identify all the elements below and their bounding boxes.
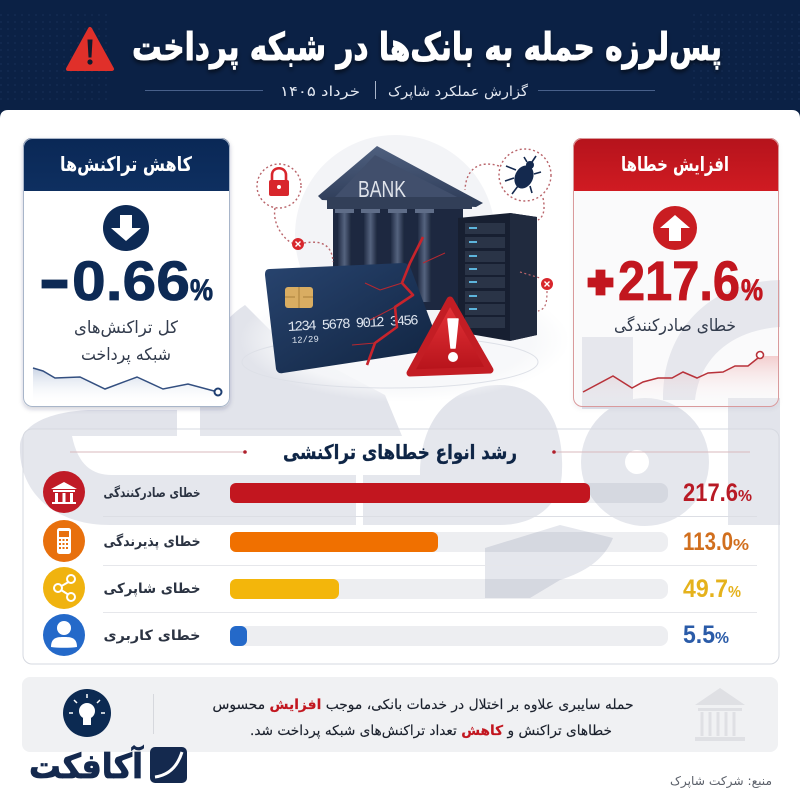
icon: up arrow — [653, 206, 697, 250]
subtitle: گزارش عملکرد شاپرک — [388, 83, 528, 100]
row: shaparak errors: % — [728, 584, 741, 601]
caption: شبکه پرداخت — [81, 345, 171, 365]
icon: down arrow — [103, 205, 149, 251]
row: shaparak errors: 49.7 — [683, 575, 728, 603]
note text: خطاهای تراکنش و کاهش تعداد تراکنش‌های شبکه پرداخت شد. — [250, 723, 612, 739]
row: acquirer errors: % — [733, 537, 749, 554]
row: issuer errors: % — [738, 488, 752, 505]
icon: light bulb — [63, 689, 111, 737]
note text — [212, 697, 634, 739]
row: acquirer errors: 113.0 — [683, 528, 733, 556]
row: user errors: 5.5 — [683, 621, 715, 649]
sparkline: rising — [583, 352, 778, 405]
icon: error badge right — [520, 272, 553, 311]
icon: bank building: BANK — [358, 176, 406, 202]
caption: خطای صادرکنندگی — [614, 315, 736, 336]
panel header: decrease: کاهش تراکنش‌ها — [60, 152, 192, 176]
figure: minus 0.66 percent — [42, 249, 213, 312]
chart heading — [70, 440, 750, 464]
row: acquirer errors — [43, 520, 749, 562]
icon: user — [43, 614, 85, 656]
panel header: decrease — [23, 138, 230, 191]
icon: card terminal — [43, 520, 85, 562]
caption: کل تراکنش‌های — [74, 318, 179, 338]
subtitle: خرداد ۱۴۰۵ — [280, 84, 360, 100]
row: issuer errors: خطای صادرکنندگی — [104, 485, 200, 501]
illustration: bank under attack — [240, 135, 570, 402]
icon: cracked credit card: 1234 5678 9012 3456 — [287, 313, 419, 336]
header band — [0, 0, 800, 118]
panel: error growth chart — [23, 429, 779, 664]
icon: faded bank — [695, 688, 745, 741]
chart heading: رشد انواع خطاهای تراکنشی — [283, 440, 517, 464]
source note: منبع: شرکت شاپرک — [670, 774, 772, 789]
panel: decrease in transactions — [23, 138, 230, 407]
figure: minus 0.66 percent: 0.66 — [72, 249, 190, 312]
icon: padlock in dashed circle — [257, 164, 333, 262]
row: user errors: % — [715, 630, 729, 647]
panel header: increase: افزایش خطاها — [621, 152, 729, 176]
icon: header warning triangle — [68, 29, 112, 69]
white body edge — [0, 110, 800, 150]
row: shaparak errors: خطای شاپرکی — [104, 581, 200, 597]
row: acquirer errors: خطای پذیرندگی — [104, 533, 200, 550]
icon: bug in dashed circle — [465, 149, 551, 220]
panel header: increase — [573, 138, 779, 191]
watermark logo — [20, 280, 780, 598]
sparkline: falling — [33, 368, 222, 405]
row: user errors: خطای کاربری — [104, 628, 200, 644]
panel: takeaway note — [22, 677, 778, 752]
row: shaparak errors — [43, 567, 741, 609]
caption — [74, 318, 179, 365]
figure: minus 0.66 percent: % — [190, 274, 213, 307]
icon: cracked credit card: 12/29 — [292, 335, 319, 346]
note text: حمله سایبری علاوه بر اختلال در خدمات بانکی، موجب افزایش محسوس — [212, 697, 634, 713]
icon: cracked credit card — [265, 237, 445, 373]
icon: server rack — [458, 213, 537, 341]
row: user errors — [43, 614, 729, 656]
figure: plus 217.6 percent: % — [741, 274, 763, 307]
icon: bank building — [318, 146, 483, 310]
logo: آکافکت — [29, 745, 144, 787]
subtitle — [145, 81, 655, 100]
figure: plus 217.6 percent: 217.6 — [618, 249, 740, 312]
row: issuer errors — [43, 471, 752, 513]
icon: red warning triangle — [410, 300, 490, 373]
panel: increase in errors — [573, 138, 779, 407]
icon: bank — [43, 471, 85, 513]
icon: error badge left — [292, 238, 304, 250]
row: issuer errors: 217.6 — [683, 479, 738, 507]
icon: share network — [43, 567, 85, 609]
